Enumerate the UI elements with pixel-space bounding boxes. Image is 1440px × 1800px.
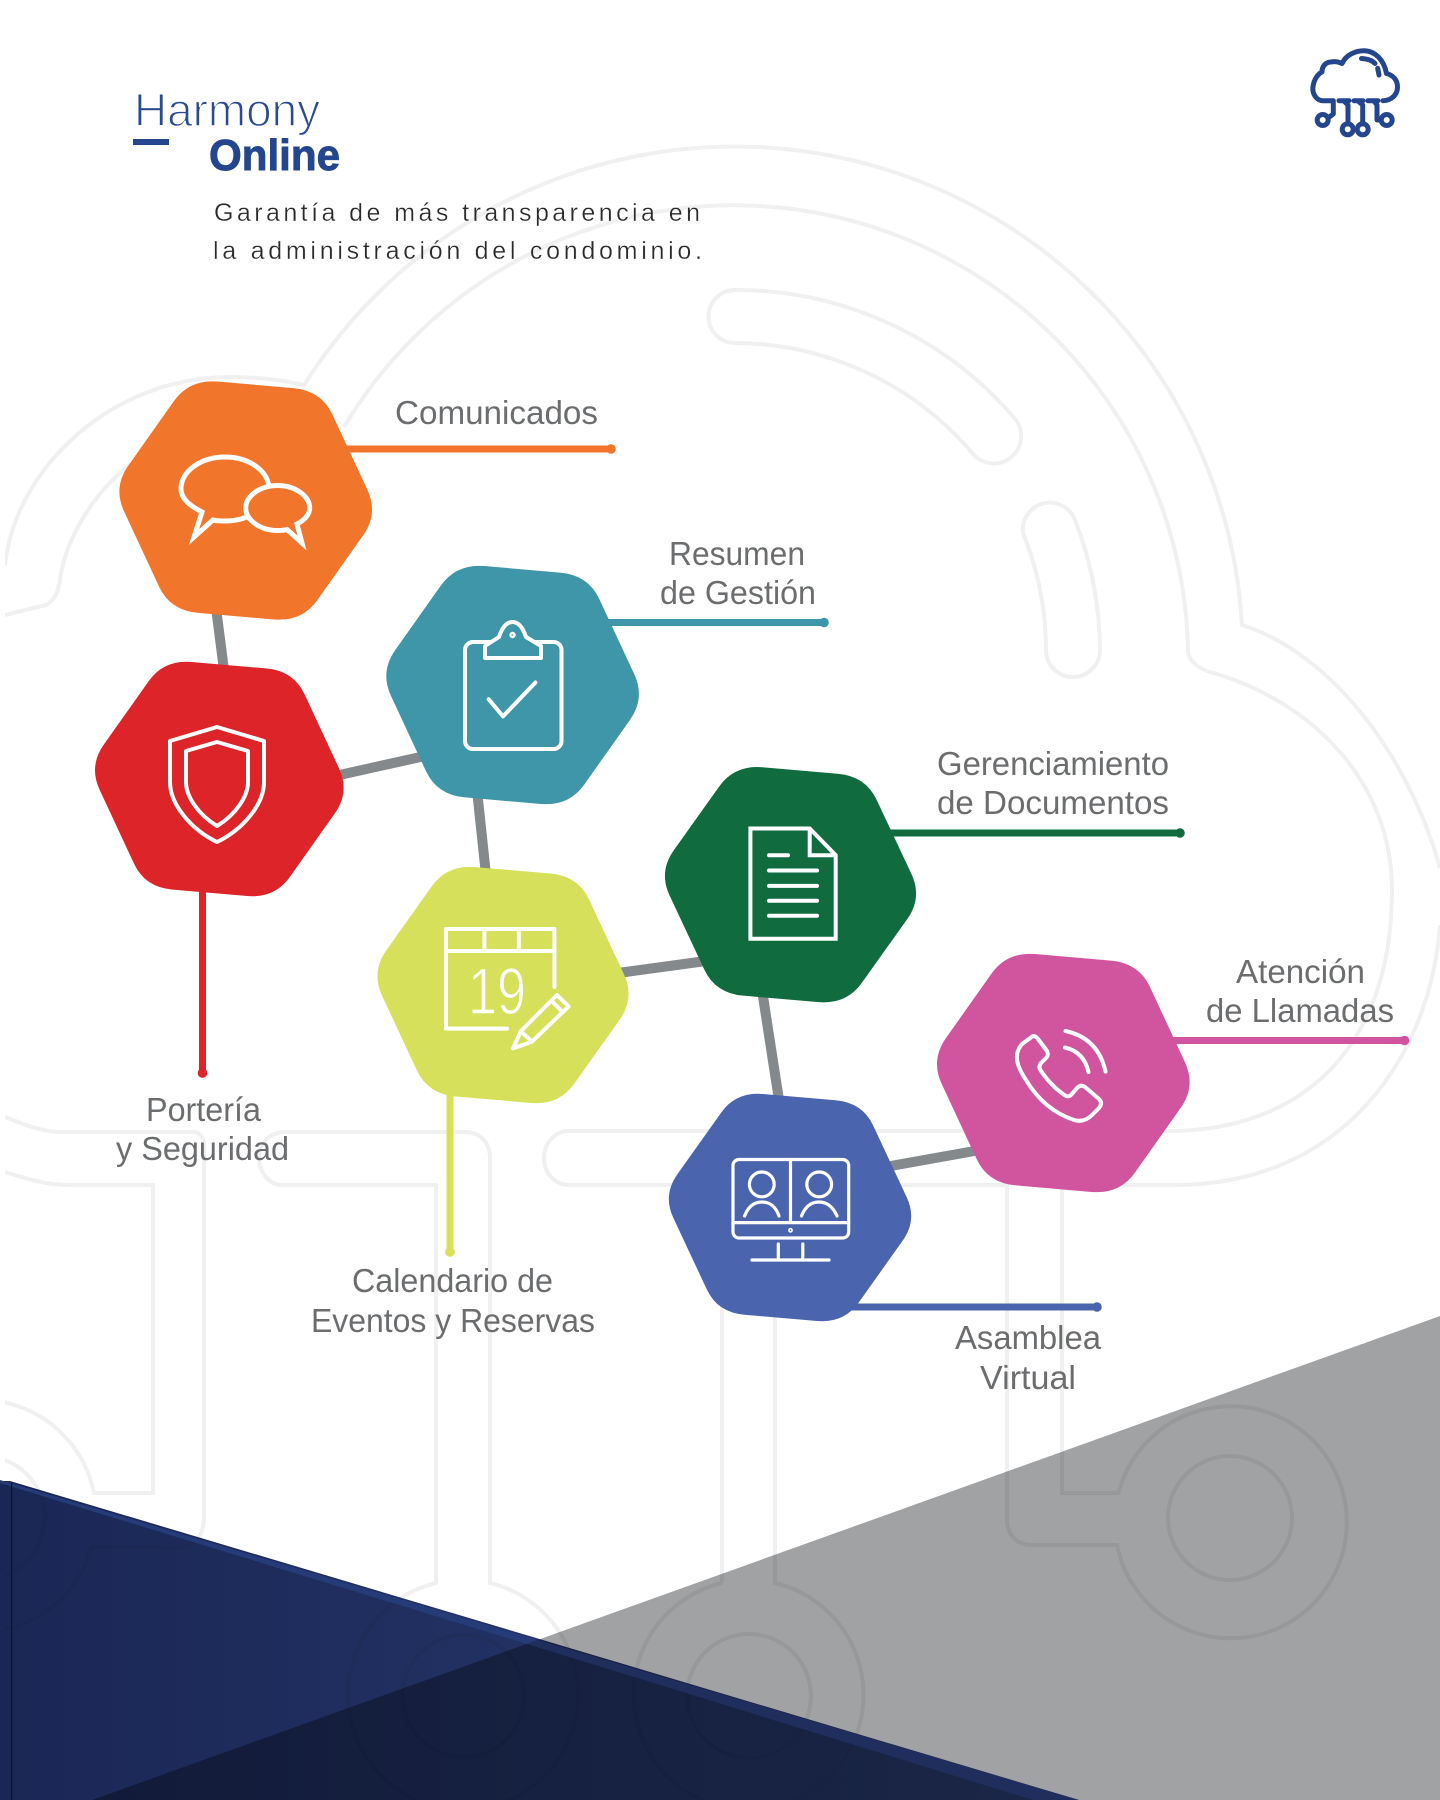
leader lines with end dots bbox=[198, 444, 1409, 1312]
label: Gerenciamiento de Documentos: de Documentos bbox=[937, 784, 1169, 821]
label: Portería y Seguridad bbox=[116, 1091, 289, 1167]
label: Calendario de Eventos y Reservas bbox=[311, 1262, 595, 1339]
icon: shield bbox=[170, 727, 264, 842]
icon: calendar and pencil: 19 bbox=[468, 954, 526, 1028]
label: Asamblea Virtual: Asamblea bbox=[955, 1319, 1102, 1356]
title: Online: Online bbox=[209, 131, 340, 180]
label: Portería y Seguridad: y Seguridad bbox=[116, 1130, 289, 1167]
hexagon: Calendario de Eventos y Reservas bbox=[377, 867, 629, 1103]
title bbox=[133, 84, 340, 180]
hexagon: Portería y Seguridad bbox=[95, 662, 344, 896]
label: Comunicados: Comunicados bbox=[395, 394, 598, 431]
label: Atención de Llamadas: Atención bbox=[1236, 953, 1365, 990]
leader: Asamblea Virtual bbox=[845, 1302, 1102, 1312]
bottom grey triangle bbox=[92, 1316, 1440, 1800]
icon: video meeting monitor bbox=[733, 1160, 849, 1260]
bottom navy triangle bbox=[0, 1480, 1079, 1800]
leader: Resumen de Gestión bbox=[600, 618, 829, 627]
icon: cloud circuit logo bbox=[1313, 51, 1398, 135]
label: Gerenciamiento de Documentos bbox=[937, 745, 1169, 821]
subtitle: Garantía de más transparencia en bbox=[214, 199, 700, 227]
title: Harmony: Harmony bbox=[134, 84, 320, 136]
label: Gerenciamiento de Documentos: Gerenciamiento bbox=[937, 745, 1169, 782]
hexagon: Comunicados bbox=[119, 381, 372, 620]
leader: Calendario bbox=[445, 1090, 455, 1257]
label: Asamblea Virtual bbox=[955, 1319, 1102, 1396]
title accent bar bbox=[133, 139, 169, 145]
icon: speech bubbles bbox=[181, 457, 310, 543]
hexagon: Gerenciamiento de Documentos bbox=[665, 767, 916, 1002]
icon: calendar and pencil bbox=[446, 929, 569, 1048]
leader: Comunicados bbox=[340, 444, 616, 454]
label: Asamblea Virtual: Virtual bbox=[980, 1359, 1076, 1396]
label: Portería y Seguridad: Portería bbox=[146, 1091, 262, 1128]
hexagon: Asamblea Virtual bbox=[669, 1094, 911, 1321]
icon: document bbox=[750, 828, 836, 939]
label: Resumen de Gestión bbox=[660, 535, 816, 611]
leader: Atención de Llamadas bbox=[1170, 1036, 1409, 1045]
label: Resumen de Gestión: de Gestión bbox=[660, 574, 816, 611]
label: Atención de Llamadas bbox=[1206, 953, 1394, 1029]
icon: clipboard check bbox=[465, 622, 562, 749]
hexagon: Atención de Llamadas bbox=[937, 954, 1190, 1192]
subtitle bbox=[213, 199, 702, 265]
subtitle: la administración del condominio. bbox=[213, 237, 702, 265]
label: Calendario de Eventos y Reservas: Eventos y Reservas bbox=[311, 1302, 595, 1339]
label: Resumen de Gestión: Resumen bbox=[669, 535, 805, 572]
label: Atención de Llamadas: de Llamadas bbox=[1206, 992, 1394, 1029]
leader: Gerenciamiento de Documentos bbox=[885, 828, 1185, 838]
hexagon: Resumen de Gestión bbox=[386, 566, 639, 804]
leader: Portería y Seguridad bbox=[198, 885, 207, 1078]
icon: telephone bbox=[1017, 1031, 1106, 1121]
grey connector network bbox=[215, 600, 980, 1167]
label: Calendario de Eventos y Reservas: Calendario de bbox=[352, 1262, 553, 1299]
